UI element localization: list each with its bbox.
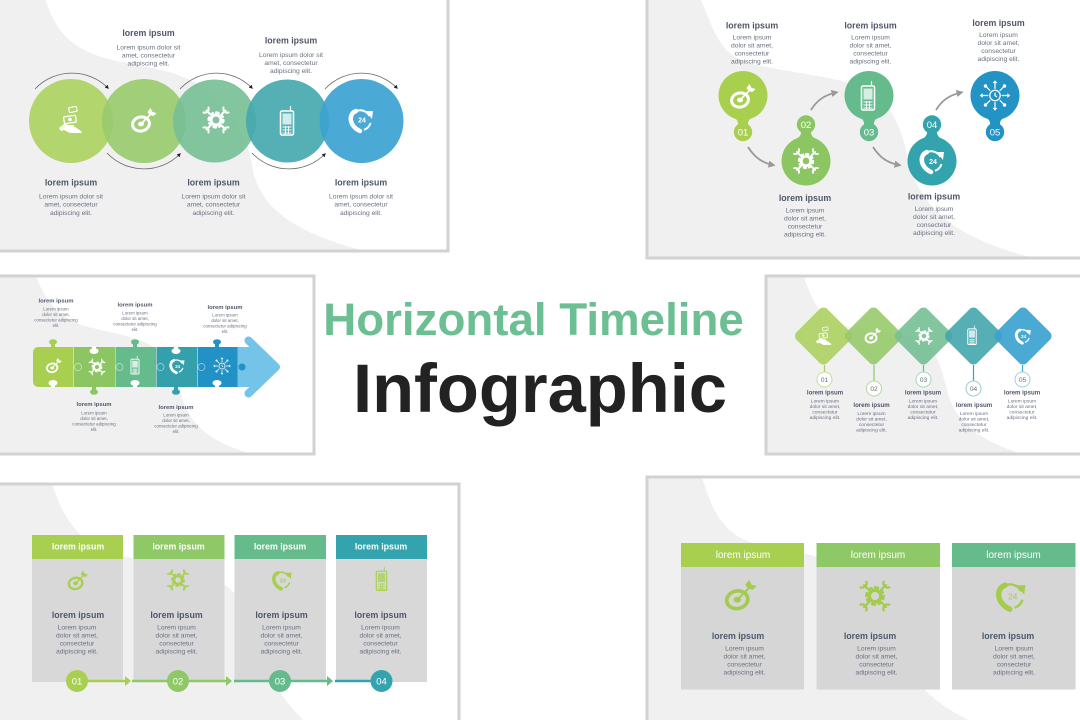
step numbers: [821, 377, 1026, 393]
column 1: adipiscing elit.: [56, 649, 98, 656]
pin 01: 01: [738, 128, 748, 138]
text block 03: dolor sit amet,: [850, 42, 892, 50]
icon: 24 hour call: [1016, 330, 1031, 343]
text block 4: elit.: [91, 427, 97, 432]
text block 4: Lorem ipsum: [81, 410, 107, 416]
text block 4: dolor sit amet,: [80, 416, 108, 421]
text block 03: [844, 20, 897, 66]
column 1: lorem ipsum: [52, 542, 104, 552]
text block 5: Lorem ipsum dolor sit: [329, 194, 393, 200]
text block 3: lorem ipsum: [905, 390, 942, 396]
icon: 24 hour call: [171, 360, 184, 373]
text block 1: lorem ipsum: [45, 178, 97, 188]
text block 2: lorem ipsum: [122, 28, 175, 38]
text block 1: amet, consectetur: [44, 202, 98, 208]
text block 4: [956, 402, 993, 433]
stems and numbered circles: [817, 365, 1030, 396]
step numbers: 03: [920, 377, 927, 384]
step 01: 01: [72, 676, 82, 688]
text block 1: [807, 390, 844, 421]
column 4: consectetur: [363, 641, 399, 648]
pin 04: [908, 115, 956, 186]
circle chain: [29, 79, 404, 163]
column 4: [336, 535, 427, 682]
step numbers: 05: [1019, 377, 1026, 384]
column 3: [234, 535, 326, 682]
text block 03: consectetur: [853, 51, 889, 58]
pin 02: [782, 115, 830, 186]
card 3: Lorem ipsum: [995, 645, 1034, 652]
column 2: lorem ipsum: [150, 610, 203, 620]
text block 1: [34, 298, 78, 328]
text block 3: Lorem ipsum: [909, 398, 937, 404]
text block 04: lorem ipsum: [908, 192, 960, 202]
text block 05: dolor sit amet,: [978, 40, 1020, 47]
column 2: consectetur: [159, 641, 195, 648]
text block 02: [779, 193, 831, 239]
pin 05: 05: [990, 128, 1000, 138]
text block 5: Lorem ipsum: [1008, 398, 1036, 404]
pin 03: 03: [864, 128, 874, 138]
text block 04: Lorem ipsum: [915, 206, 954, 213]
text block 2: elit.: [132, 327, 138, 332]
card 1: adipiscing elit.: [723, 669, 766, 676]
text block 5: consectetur adipiscing: [154, 424, 198, 428]
text block 2: Lorem ipsum: [122, 310, 148, 316]
pin 03: [844, 71, 894, 141]
text block 05: Lorem ipsum: [979, 32, 1018, 39]
icon: phone: [131, 356, 139, 374]
column 1: dolor sit amet,: [56, 633, 98, 640]
card 2: Lorem ipsum: [857, 645, 896, 652]
icon: 24 hour call: 24: [175, 364, 181, 369]
text block 03: Lorem ipsum: [851, 34, 890, 42]
text block 01: [726, 20, 778, 66]
card 3: consectetur: [997, 661, 1032, 668]
text block 2: [117, 28, 181, 68]
card 2: consectetur: [859, 661, 895, 668]
arrow head: [236, 340, 276, 394]
text block 04: adipiscing elit.: [913, 230, 955, 237]
column 4: adipiscing elit.: [359, 649, 402, 656]
step numbers: 01: [821, 377, 828, 384]
text block 01: lorem ipsum: [726, 20, 778, 30]
pin 04: 04: [927, 120, 937, 131]
text block 01: adipiscing elit.: [731, 59, 773, 66]
card 1: [681, 543, 804, 690]
text block 03: adipiscing elit.: [849, 59, 892, 66]
column 3: 24: [280, 578, 287, 584]
text block 4: [72, 402, 116, 432]
puzzle segments: [33, 339, 246, 395]
card 1: consectetur: [727, 661, 763, 668]
step 04: [370, 670, 392, 692]
text block 1: elit.: [53, 323, 59, 328]
card 3: dolor sit amet,: [993, 653, 1035, 660]
card 1: lorem ipsum: [712, 631, 764, 641]
text block 4: adipiscing elit.: [959, 427, 989, 433]
icon: target: [131, 108, 156, 133]
text block 2: dolor sit amet,: [121, 316, 149, 321]
text block 2: amet, consectetur: [122, 52, 176, 59]
column 2: lorem ipsum: [152, 542, 205, 552]
icon: gear and wrenches: [204, 108, 228, 132]
column 3: dolor sit amet,: [260, 633, 303, 640]
panel: diamond timeline: [766, 276, 1080, 454]
text block 02: Lorem ipsum: [786, 208, 825, 214]
card 3: 24: [1008, 592, 1018, 602]
text block 04: dolor sit amet,: [913, 214, 955, 221]
card 3: [952, 543, 1076, 690]
card 3: lorem ipsum: [982, 631, 1034, 641]
column 4: lorem ipsum: [354, 610, 407, 620]
text block 5: lorem ipsum: [158, 405, 194, 411]
text block 5: adipiscing elit.: [340, 210, 382, 217]
text block 2: adipiscing elit.: [856, 427, 887, 433]
text block 1: Lorem ipsum dolor sit: [39, 194, 103, 200]
text block 3: dolor sit amet,: [211, 318, 239, 323]
text block 1: adipiscing elit.: [810, 415, 840, 421]
step 02: 02: [173, 676, 183, 688]
text block 01: dolor sit amet,: [731, 42, 773, 50]
text block 4: consectetur adipiscing: [72, 422, 116, 426]
text block 2: lorem ipsum: [853, 402, 890, 409]
column 3: adipiscing elit.: [260, 649, 303, 656]
icon: mobile phone: [280, 106, 294, 135]
text block 05: lorem ipsum: [972, 18, 1025, 28]
text block 3: Lorem ipsum dolor sit: [182, 194, 246, 200]
icon: phone: [968, 326, 976, 344]
text block 5: lorem ipsum: [1004, 390, 1041, 396]
panel: three column cards: [647, 477, 1080, 720]
text block 3: [905, 390, 942, 421]
column 1: Lorem ipsum: [58, 625, 97, 632]
card 1: Lorem ipsum: [725, 645, 764, 652]
text block 5: adipiscing elit.: [1007, 415, 1037, 421]
text block 02: consectetur: [788, 224, 823, 231]
text block 3: adipiscing elit.: [908, 415, 938, 421]
icon: gear: [916, 328, 932, 344]
panel: zigzag pin timeline: [647, 0, 1080, 258]
step 02: [167, 670, 189, 692]
card 3: lorem ipsum: [986, 550, 1041, 561]
icon: gear: [89, 359, 105, 375]
step numbers: 04: [970, 386, 977, 393]
icon: 24 hour call: 24: [358, 118, 366, 124]
text block 02: lorem ipsum: [779, 193, 831, 203]
card 2: lorem ipsum: [851, 550, 905, 561]
text block 3: adipiscing elit.: [192, 210, 235, 217]
icon: target: [46, 358, 62, 373]
text block 01: Lorem ipsum: [733, 34, 772, 42]
column 4: dolor sit amet,: [360, 633, 402, 640]
diamond chain: [800, 313, 1046, 359]
column 3: consectetur: [264, 641, 300, 648]
column 2: adipiscing elit.: [155, 649, 198, 656]
pin 02: 02: [801, 120, 811, 131]
icon: 24 hour call: [351, 110, 373, 131]
step numbers: 02: [870, 386, 878, 393]
text block 2: dolor sit amet,: [856, 416, 887, 422]
column 1: lorem ipsum: [52, 610, 104, 620]
text block 3: [203, 305, 247, 334]
column 2: [134, 535, 224, 682]
text block 5: consectetur: [1009, 409, 1035, 415]
text block 3: amet, consectetur: [187, 202, 241, 208]
step 03: 03: [275, 676, 285, 688]
text block 4: lorem ipsum: [956, 402, 993, 409]
card 1: lorem ipsum: [716, 550, 770, 561]
text block 1: consectetur adipiscing: [34, 318, 78, 322]
text block 3: Lorem ipsum: [212, 312, 238, 318]
text block 1: adipiscing elit.: [50, 210, 92, 217]
icon: hand with money: [59, 106, 82, 133]
text block 2: Lorem ipsum dolor sit: [117, 44, 181, 51]
text block 3: dolor sit amet,: [908, 404, 938, 410]
text block 4: Lorem ipsum dolor sit: [259, 52, 323, 59]
text block 4: dolor sit amet,: [959, 416, 989, 422]
text block 05: consectetur: [981, 48, 1017, 55]
text block 4: Lorem ipsum: [960, 411, 988, 417]
text block 5: dolor sit amet,: [1007, 404, 1037, 410]
card 2: dolor sit amet,: [856, 653, 898, 660]
column 3: lorem ipsum: [254, 542, 306, 552]
text block 5: lorem ipsum: [335, 178, 387, 188]
text block 4: consectetur: [961, 422, 987, 428]
text block 1: dolor sit amet,: [810, 404, 840, 410]
text block 03: lorem ipsum: [844, 20, 897, 30]
text block 3: [182, 178, 246, 217]
text block 04: consectetur: [917, 222, 952, 229]
column 1: consectetur: [60, 641, 95, 648]
pin 01: [718, 71, 768, 141]
text block 4: adipiscing elit.: [270, 68, 312, 75]
arc arrows: [35, 73, 397, 169]
text block 5: amet, consectetur: [334, 202, 388, 208]
card 3: adipiscing elit.: [993, 669, 1035, 676]
icon: 24 hour call: 24: [1021, 334, 1027, 339]
text block 3: lorem ipsum: [187, 178, 240, 188]
column 2: dolor sit amet,: [156, 633, 198, 640]
text block 4: lorem ipsum: [76, 402, 112, 408]
title: Horizontal Timeline: Horizontal Timeline: [323, 294, 744, 345]
text block 04: [908, 192, 960, 237]
text block 2: Lorem ipsum: [857, 411, 886, 417]
card 2: [816, 543, 940, 690]
card 2: lorem ipsum: [844, 631, 896, 641]
column 2: Lorem ipsum: [157, 625, 196, 632]
step 04: 04: [376, 676, 387, 688]
text block 01: consectetur: [735, 51, 770, 58]
panel: puzzle arrow timeline: [0, 276, 314, 454]
text block 2: consectetur: [859, 422, 885, 428]
column 1: [32, 535, 123, 682]
title: Infographic: Infographic: [353, 350, 727, 427]
text block 4: amet, consectetur: [264, 60, 318, 67]
text block 05: [972, 18, 1025, 63]
text block 3: elit.: [222, 329, 228, 334]
text block 1: lorem ipsum: [38, 298, 74, 304]
text block 1: dolor sit amet,: [42, 312, 70, 317]
icon: network: [213, 357, 231, 375]
curved arrows: [748, 92, 961, 165]
text block 02: adipiscing elit.: [784, 232, 826, 239]
step 03: [269, 670, 291, 692]
text block 2: [113, 302, 157, 332]
text block 5: elit.: [173, 429, 179, 434]
text block 3: consectetur: [910, 409, 936, 415]
step 01: [66, 670, 88, 692]
text block 02: dolor sit amet,: [784, 216, 826, 222]
text block 1: [39, 178, 103, 217]
text block 5: [329, 178, 393, 217]
text block 4: lorem ipsum: [265, 36, 317, 46]
text block 3: lorem ipsum: [207, 305, 243, 311]
text block 2: [853, 402, 890, 433]
text block 2: lorem ipsum: [117, 302, 153, 308]
timeline arrows: [85, 676, 375, 686]
text block 05: adipiscing elit.: [977, 56, 1020, 63]
text block 3: consectetur adipiscing: [203, 324, 247, 328]
column 4: lorem ipsum: [355, 542, 407, 552]
text block 1: consectetur: [812, 409, 838, 415]
icon: target: [865, 328, 881, 344]
text block 5: [154, 405, 198, 434]
text block 1: lorem ipsum: [807, 390, 844, 396]
column 3: Lorem ipsum: [262, 625, 301, 632]
card 1: dolor sit amet,: [724, 653, 766, 660]
text block 5: Lorem ipsum: [163, 412, 189, 418]
text block 2: adipiscing elit.: [127, 60, 170, 68]
text block 5: dolor sit amet,: [162, 418, 190, 423]
card 2: adipiscing elit.: [855, 669, 898, 676]
column 4: Lorem ipsum: [361, 625, 400, 632]
text block 2: consectetur adipiscing: [113, 322, 157, 326]
pin 04: 24: [929, 159, 937, 166]
text block 4: [259, 36, 323, 75]
icon: hand with money: [816, 327, 831, 345]
text block 1: Lorem ipsum: [811, 398, 839, 404]
column 3: lorem ipsum: [255, 610, 308, 620]
pin 05: [970, 71, 1020, 141]
panel: overlapping circles timeline: [0, 0, 448, 251]
panel: four column timeline: [0, 484, 459, 720]
text block 1: Lorem ipsum: [43, 306, 69, 312]
text block 5: [1004, 390, 1041, 421]
